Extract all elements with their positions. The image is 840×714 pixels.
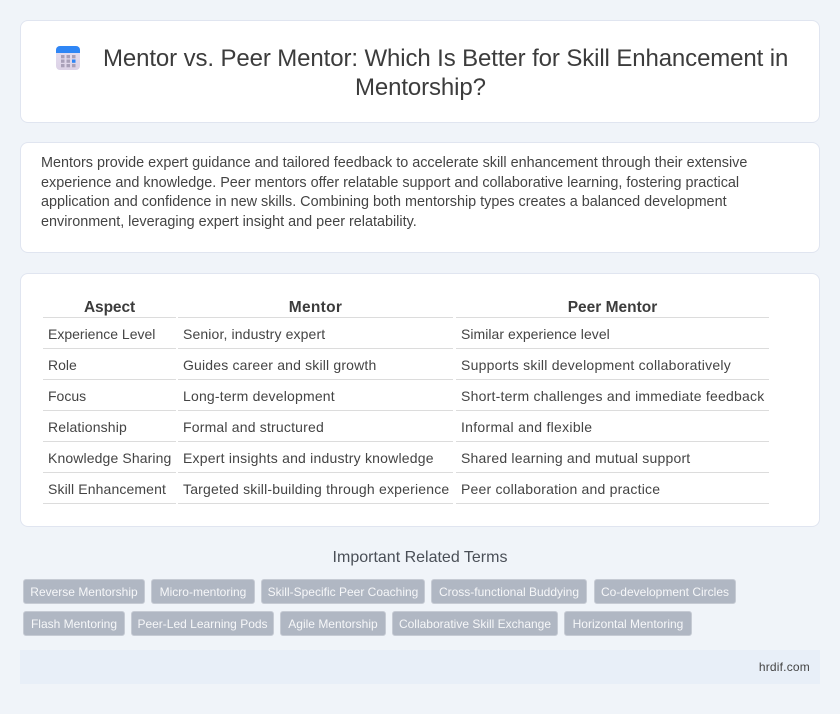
tags: related terms: Peer-Led Learning Pods [137, 617, 268, 631]
table header: Peer Mentor [568, 299, 657, 316]
text block: description: application and confidence in new skills. Combining both mentorship types creates a balanced development [41, 194, 727, 210]
title: Mentor vs. Peer Mentor: Which Is Better for Skill Enhancement in [103, 45, 788, 72]
table rows: Knowledge Sharing [48, 450, 171, 466]
text block: description: experience and knowledge. Peer mentors offer relatable support and collaborative learning, fostering practical [41, 175, 739, 191]
tags: related terms: Micro-mentoring [160, 585, 246, 599]
table rows: Short-term challenges and immediate feedback [461, 388, 764, 404]
table rows: Expert insights and industry knowledge [183, 450, 434, 466]
tags: related terms: Reverse Mentorship [30, 585, 138, 599]
footer source: hrdif.com [759, 660, 810, 674]
table rows: Peer collaboration and practice [461, 481, 660, 497]
table header: Aspect [84, 299, 135, 316]
table rows: Long-term development [183, 388, 335, 404]
heading: related terms: Important Related Terms [333, 549, 507, 566]
table rows: Skill Enhancement [48, 481, 166, 497]
table rows: Experience Level [48, 326, 155, 342]
table rows: Shared learning and mutual support [461, 450, 690, 466]
table rows: Formal and structured [183, 419, 324, 435]
table rows: Similar experience level [461, 326, 610, 342]
tags: related terms: Skill-Specific Peer Coaching [268, 585, 418, 599]
title [103, 45, 788, 101]
tags: related terms [23, 579, 736, 636]
table rows: Role [48, 357, 77, 373]
table rows: Supports skill development collaboratively [461, 357, 731, 373]
text block: description [41, 155, 747, 230]
table rows: Senior, industry expert [183, 326, 325, 342]
panel: description [20, 142, 820, 253]
tags: related terms: Co-development Circles [601, 585, 729, 599]
panel: comparison table [20, 273, 820, 527]
table header: Mentor [289, 299, 342, 316]
table header [84, 299, 658, 316]
tags: related terms: Cross-functional Buddying [439, 585, 579, 599]
footer [20, 650, 820, 684]
table rows: Focus [48, 388, 86, 404]
table rows: Guides career and skill growth [183, 357, 376, 373]
tags: related terms: Horizontal Mentoring [573, 617, 683, 631]
panel: header [20, 20, 820, 123]
text block: description: environment, leveraging expert insight and peer relatability. [41, 214, 417, 230]
table rows: Relationship [48, 419, 127, 435]
tags: related terms: Agile Mentorship [288, 617, 378, 631]
table rows: Informal and flexible [461, 419, 592, 435]
text block: description: Mentors provide expert guidance and tailored feedback to accelerate skill enhancement through their extensive [41, 155, 747, 171]
icon: calendar [56, 46, 80, 70]
table rows: Targeted skill-building through experience [183, 481, 449, 497]
title: Mentorship? [355, 74, 486, 101]
tags: related terms: Collaborative Skill Exchange [399, 617, 551, 631]
tags: related terms: Flash Mentoring [31, 617, 117, 631]
table rows [43, 317, 769, 504]
